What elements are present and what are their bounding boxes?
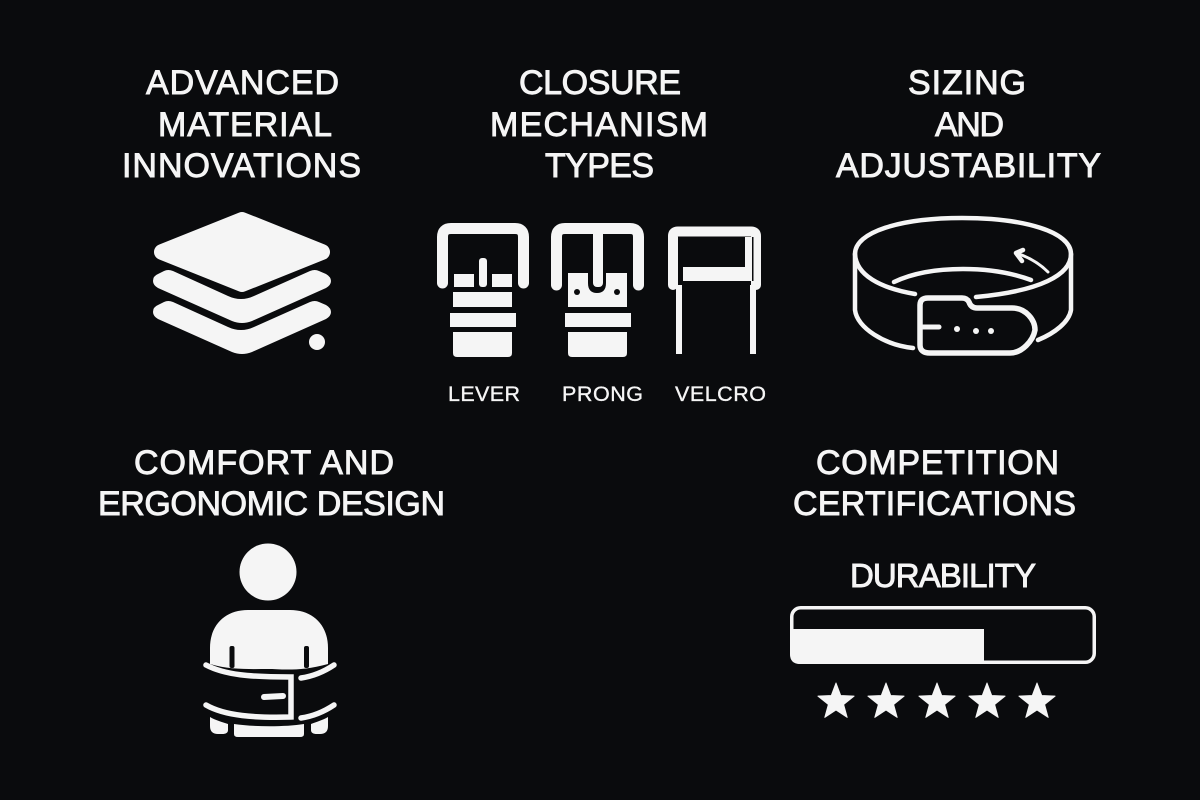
panel: competition certifications bbox=[790, 444, 1094, 717]
heading: competition certifications: CERTIFICATIONS bbox=[793, 485, 1076, 523]
panel: sizing and adjustability bbox=[836, 64, 1101, 353]
heading: sizing and adjustability: SIZING bbox=[908, 64, 1026, 102]
label: lever: LEVER bbox=[448, 382, 520, 406]
heading: advanced material innovations bbox=[122, 64, 361, 185]
heading: advanced material innovations: MATERIAL bbox=[158, 106, 332, 144]
label: durability: DURABILITY bbox=[850, 557, 1036, 594]
heading: closure mechanism types bbox=[490, 64, 708, 185]
label: velcro: VELCRO bbox=[675, 382, 766, 406]
heading: closure mechanism types: TYPES bbox=[545, 147, 654, 185]
heading: closure mechanism types: CLOSURE bbox=[519, 64, 681, 102]
heading: competition certifications bbox=[793, 444, 1076, 523]
heading: advanced material innovations: ADVANCED bbox=[146, 64, 339, 102]
rating: five stars bbox=[818, 683, 1055, 717]
icon: lever buckle bbox=[442, 228, 524, 357]
icon: prong buckle bbox=[556, 228, 638, 357]
heading: competition certifications: COMPETITION bbox=[816, 444, 1059, 482]
icon: person wearing belt bbox=[206, 544, 334, 737]
panel: comfort and ergonomic design bbox=[98, 444, 445, 737]
durability progress bar bbox=[790, 608, 1094, 664]
icon: material layers bbox=[153, 220, 331, 354]
heading: advanced material innovations: INNOVATIONS bbox=[122, 147, 361, 185]
panel: closure mechanism types bbox=[442, 64, 766, 406]
heading: closure mechanism types: MECHANISM bbox=[490, 106, 708, 144]
label: prong: PRONG bbox=[562, 382, 643, 406]
panel: advanced material innovations bbox=[122, 64, 361, 354]
heading: sizing and adjustability bbox=[836, 64, 1101, 185]
heading: comfort and ergonomic design: ERGONOMIC DESIGN bbox=[98, 485, 445, 523]
heading: sizing and adjustability: AND bbox=[935, 106, 1004, 144]
heading: comfort and ergonomic design: COMFORT AND bbox=[134, 444, 394, 482]
heading: comfort and ergonomic design bbox=[98, 444, 445, 523]
icon: adjustable belt bbox=[855, 218, 1071, 353]
icon: velcro strap bbox=[673, 232, 756, 354]
heading: sizing and adjustability: ADJUSTABILITY bbox=[836, 147, 1101, 185]
